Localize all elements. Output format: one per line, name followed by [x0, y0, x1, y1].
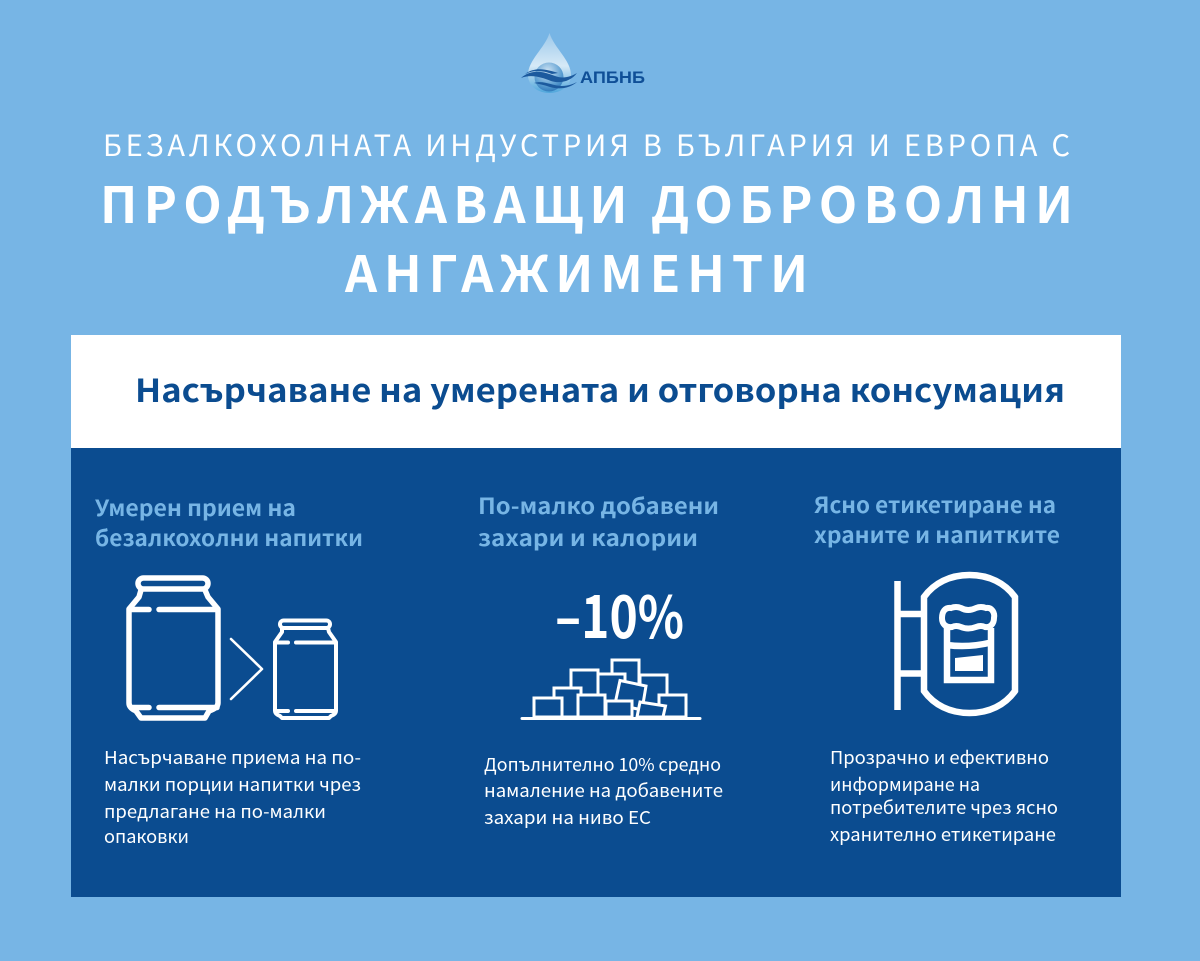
logo text: АПБНБ — [580, 68, 645, 87]
body text: Насърчаване приема на по- — [104, 744, 361, 770]
column heading — [814, 488, 1060, 550]
body text: потребителите чрез ясно — [830, 794, 1058, 820]
icon: sugar cubes — [522, 660, 700, 718]
logo: АПБНБ — [521, 33, 645, 93]
body text: предлагане на по-малки — [104, 798, 326, 824]
column heading — [478, 489, 719, 553]
column heading: захари и калории — [478, 521, 698, 553]
column heading: храните и напитките — [814, 518, 1060, 550]
column: moderate intake — [95, 491, 363, 849]
icon: large can — [129, 578, 218, 718]
body text: захари на ниво ЕС — [484, 804, 651, 830]
minus ten percent: –10% — [555, 571, 684, 655]
column: clear labelling — [814, 488, 1060, 847]
body text: намаление на добавените — [484, 777, 723, 803]
body text — [830, 744, 1058, 847]
column: less sugar — [478, 489, 723, 830]
body text: информиране на — [830, 771, 980, 797]
column heading: По-малко добавени — [478, 489, 719, 521]
column heading: Ясно етикетиране на — [814, 488, 1056, 520]
panel: dark blue content — [71, 448, 1121, 897]
body text: Прозрачно и ефективно — [830, 744, 1049, 770]
body text — [104, 744, 361, 849]
icon: small can — [275, 620, 336, 718]
column heading: Умерен прием на — [95, 491, 296, 523]
icon: chevron arrow — [231, 639, 262, 699]
body text — [484, 751, 723, 830]
title — [100, 123, 1073, 307]
title line 2: ПРОДЪЛЖАВАЩИ ДОБРОВОЛНИ — [100, 166, 1073, 238]
panel heading: Насърчаване на умерената и отговорна консумация — [135, 366, 1065, 412]
body text: малки порции напитки чрез — [104, 771, 361, 797]
body text: Допълнително 10% средно — [484, 751, 721, 777]
body text: опаковки — [104, 823, 189, 849]
panel: white heading band — [71, 335, 1121, 448]
body text: хранително етикетиране — [830, 821, 1056, 847]
icon: sphere — [534, 62, 564, 92]
icon: water drop — [528, 33, 571, 93]
column heading — [95, 491, 363, 553]
icon: hanging shop sign — [897, 575, 1015, 713]
column heading: безалкохолни напитки — [95, 521, 363, 553]
icon: waves — [521, 69, 577, 88]
title line 1: БЕЗАЛКОХОЛНАТА ИНДУСТРИЯ В БЪЛГАРИЯ И ЕВРОПА С — [103, 123, 1070, 165]
title line 3: АНГАЖИМЕНТИ — [344, 235, 808, 307]
